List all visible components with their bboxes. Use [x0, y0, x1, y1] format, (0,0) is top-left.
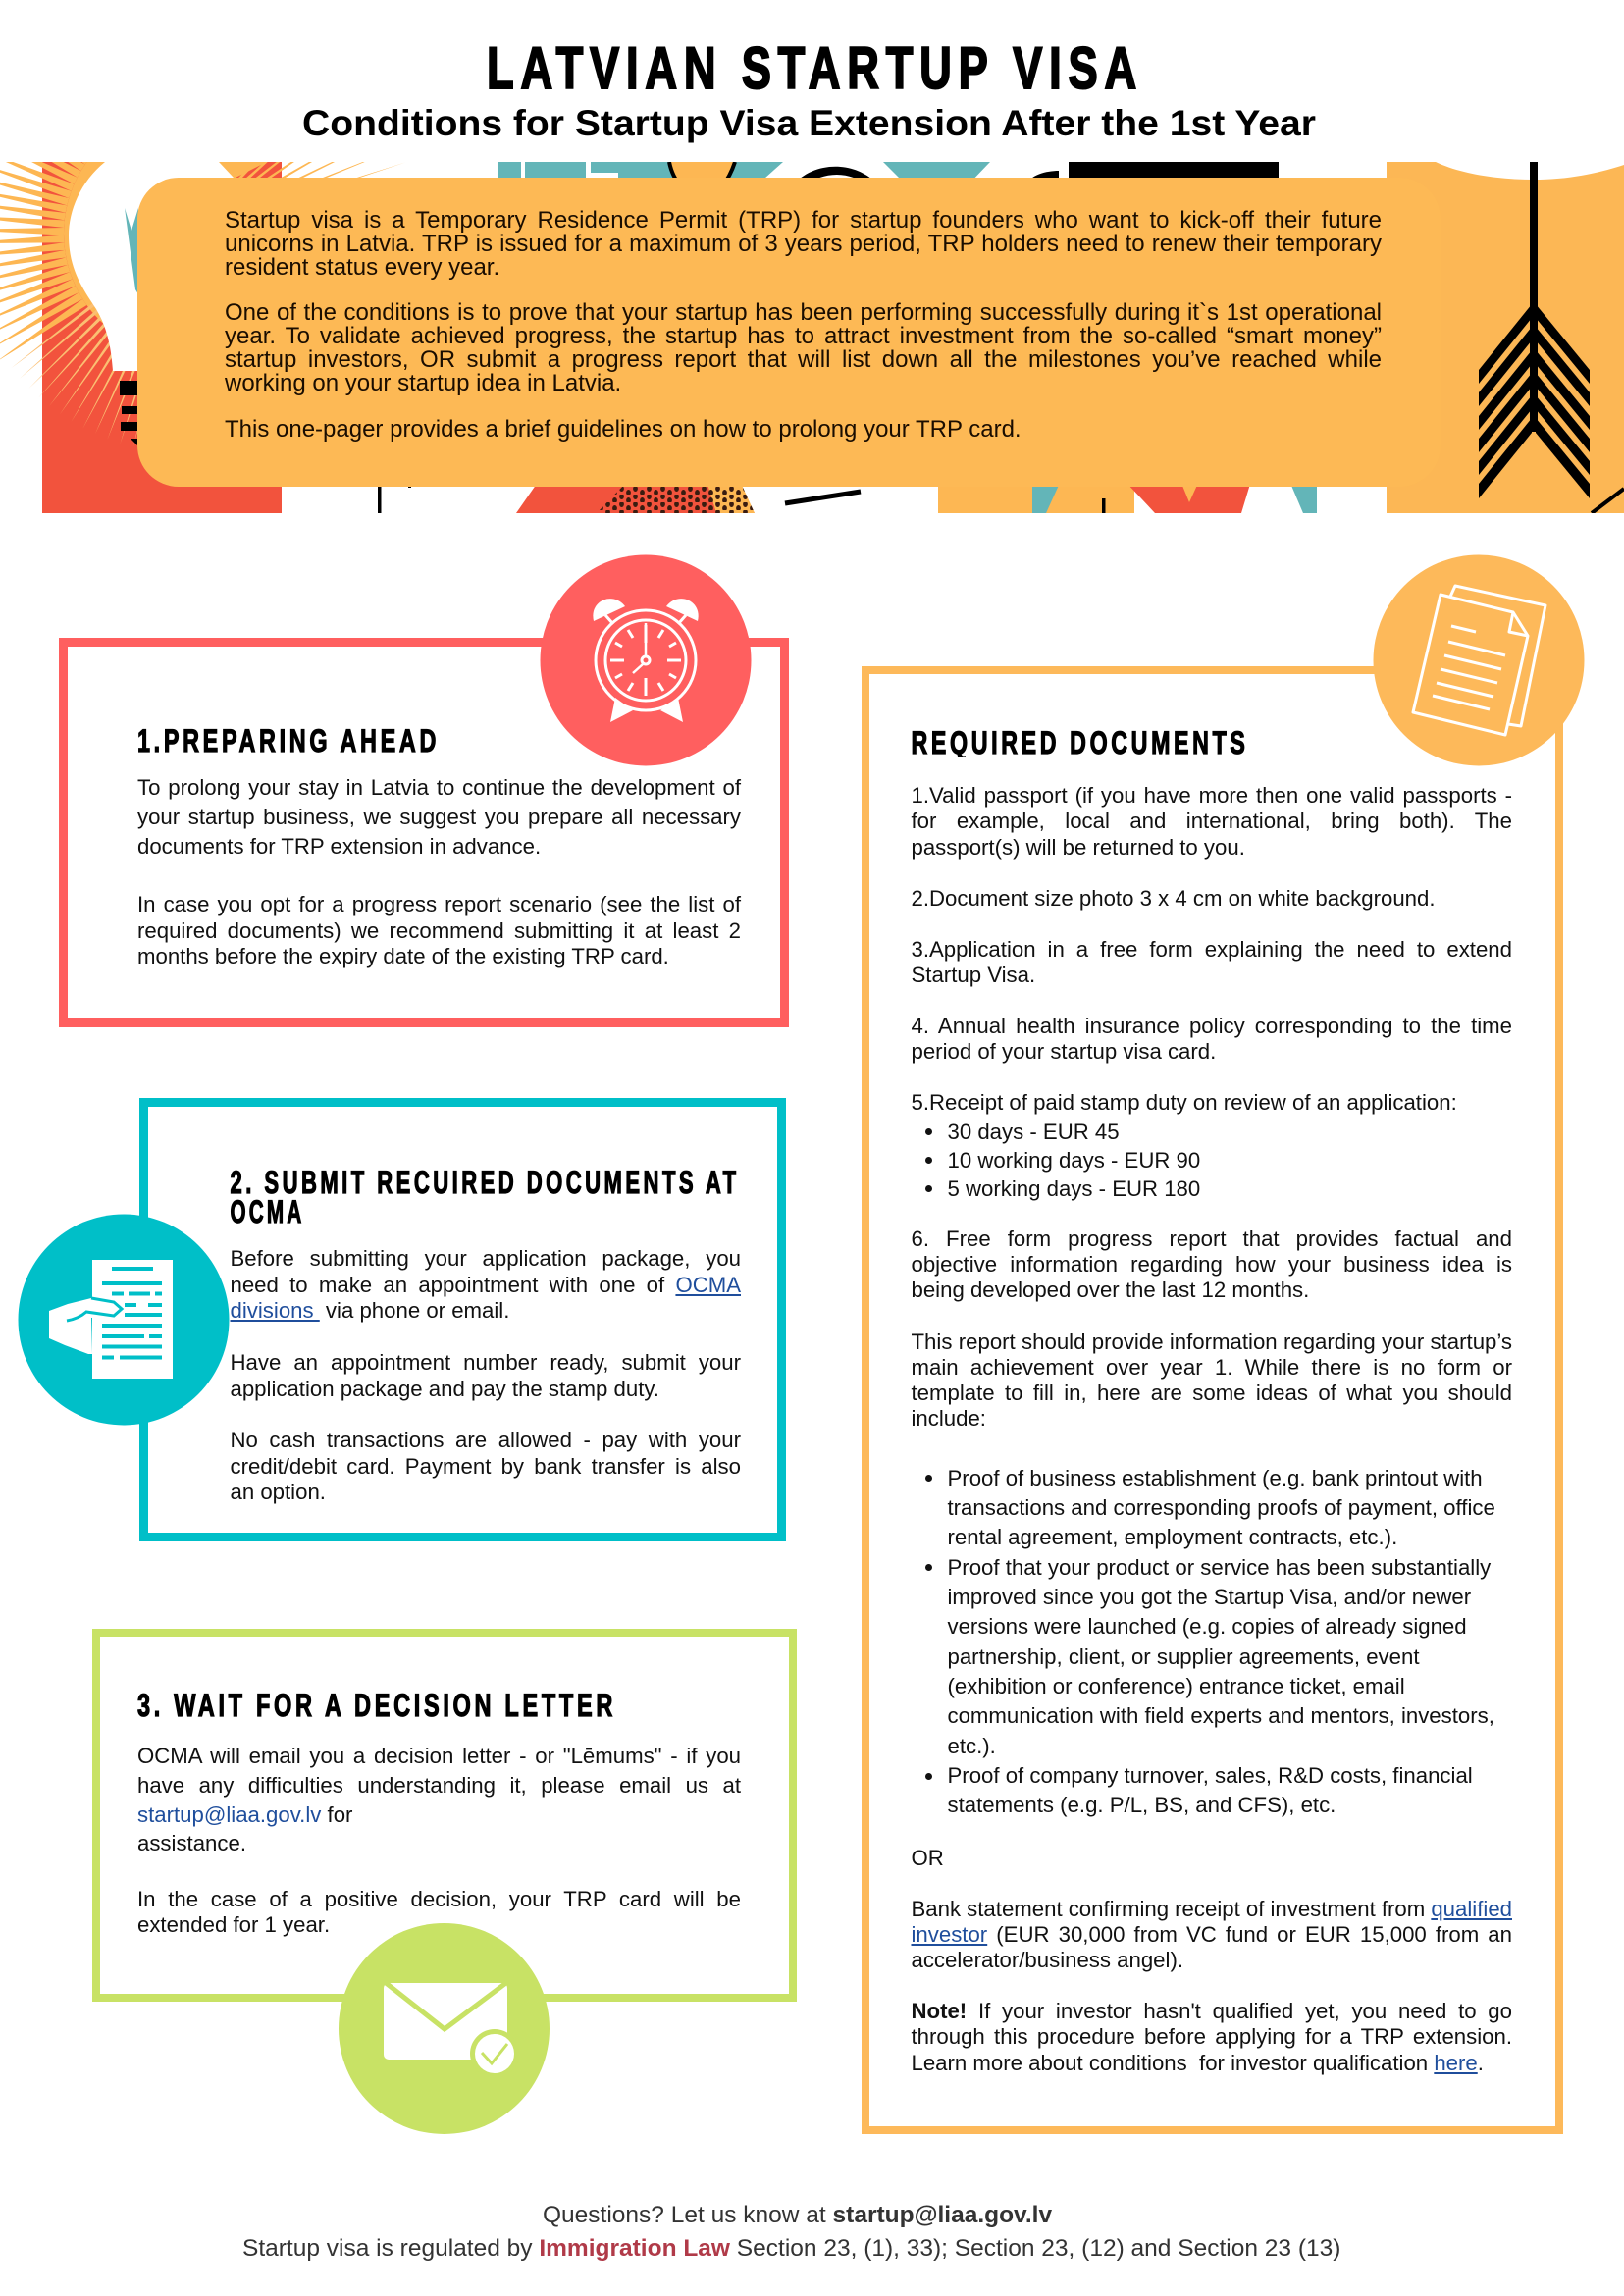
panel: required documents — [862, 555, 1584, 2134]
intro paragraph 1: resident status every year. — [225, 254, 499, 281]
intro paragraph 2: One of the conditions is to prove that your startup has been performing successfully during it`s 1st operational — [225, 299, 1382, 326]
list: report ideas: Proof that your product or service has been substantially — [948, 1555, 1491, 1580]
text: submit paragraph 1: need to make an appointment with one of OCMA — [230, 1272, 741, 1297]
banner illustration — [0, 162, 1624, 513]
text: item 5 stamp duty: 5.Receipt of paid stamp duty on review of an application: — [911, 1090, 1457, 1115]
list: report ideas: partnership, client, or supplier agreements, event — [948, 1644, 1419, 1669]
text: decision paragraph 1 — [137, 1744, 741, 1855]
intro paragraph 1: Startup visa is a Temporary Residence Permit (TRP) for startup founders who want to kick-off their future — [225, 207, 1382, 234]
icon: envelope with check — [339, 1923, 550, 2134]
text: item 6 progress report — [911, 1226, 1512, 1302]
text: preparing paragraph 1: To prolong your stay in Latvia to continue the development of — [137, 775, 741, 800]
subtitle: Conditions for Startup Visa Extension After the 1st Year — [302, 103, 1316, 143]
text: report description: This report should provide information regarding your startup’s — [911, 1329, 1512, 1354]
text: preparing paragraph 1: your startup business, we suggest you prepare all necessary — [137, 805, 741, 829]
list: stamp duty fees: 30 days - EUR 45 — [948, 1120, 1120, 1144]
list: stamp duty fees: 10 working days - EUR 90 — [948, 1148, 1200, 1173]
text: item 3 application: Startup Visa. — [911, 963, 1035, 987]
text: submit paragraph 1: Before submitting your application package, you — [230, 1246, 741, 1271]
text: preparing paragraph 2 — [137, 892, 742, 968]
list: report ideas: etc.). — [948, 1734, 996, 1758]
text: item 6 progress report: 6. Free form progress report that provides factual and — [911, 1226, 1512, 1250]
list: report ideas: Proof of company turnover, sales, R&D costs, financial — [948, 1763, 1473, 1788]
text: item 4 insurance — [911, 1014, 1512, 1064]
text: preparing paragraph 1 — [137, 775, 742, 859]
text: note — [911, 1999, 1512, 2075]
text: submit paragraph 3: No cash transactions are allowed - pay with your — [230, 1428, 741, 1452]
text: item 6 progress report: objective information regarding how your business idea is — [911, 1252, 1512, 1277]
icon: hand on document — [18, 1215, 230, 1425]
list: report ideas: versions were launched (e.g. copies of already signed — [948, 1614, 1467, 1639]
text: note: Note! If your investor hasn't qualified yet, you need to go — [911, 1999, 1512, 2023]
panel: intro — [137, 178, 1441, 487]
text: submit paragraph 1 — [230, 1246, 741, 1323]
panel: submit documents — [18, 1098, 786, 1541]
list: report ideas: Proof of business establishment (e.g. bank printout with — [948, 1466, 1483, 1489]
text: preparing paragraph 2: required documents) we recommend submitting it at least 2 — [137, 918, 741, 942]
text: submit paragraph 1: divisions via phone or email. — [230, 1298, 509, 1323]
text: decision paragraph 1: startup@liaa.gov.lv for — [137, 1802, 352, 1827]
text: decision paragraph 1: OCMA will email you a decision letter - or "Lēmums" - if you — [137, 1744, 741, 1768]
text: submit paragraph 3: credit/debit card. Payment by bank transfer is also — [230, 1454, 741, 1478]
text: item 1 passport: passport(s) will be returned to you. — [911, 835, 1245, 860]
list: stamp duty fees: 5 working days - EUR 180 — [948, 1176, 1200, 1201]
footer line: questions: Questions? Let us know at startup@liaa.gov.lv — [543, 2202, 1052, 2227]
text: preparing paragraph 2: months before the expiry date of the existing TRP card. — [137, 944, 669, 968]
list: report ideas: improved since you got the Startup Visa, and/or newer — [948, 1585, 1471, 1609]
text: bank statement: accelerator/business angel). — [911, 1948, 1183, 1972]
text: preparing paragraph 2: In case you opt for a progress report scenario (see the list of — [137, 892, 741, 916]
text: bank statement: investor (EUR 30,000 from VC fund or EUR 15,000 from an — [911, 1922, 1512, 1947]
footer line: regulation: Startup visa is regulated by Immigration Law Section 23, (1), 33); Section 23, (12) and Section 23 (13) — [242, 2235, 1340, 2261]
text: decision paragraph 2: extended for 1 year. — [137, 1911, 330, 1937]
text: report description: template to fill in, here are some ideas of what you should — [911, 1381, 1512, 1405]
text: submit paragraph 2 — [230, 1350, 741, 1401]
list: report ideas: communication with field experts and mentors, investors, — [948, 1703, 1494, 1728]
text: bank statement — [911, 1896, 1512, 1972]
text: item 4 insurance: period of your startup visa card. — [911, 1039, 1216, 1064]
text: note: through this procedure before applying for a TRP extension. — [911, 2024, 1512, 2049]
intro paragraph 3: This one-pager provides a brief guidelines on how to prolong your TRP card. — [225, 416, 1022, 443]
text: bank statement: Bank statement confirming receipt of investment from qualified — [911, 1896, 1512, 1921]
text: item 6 progress report: being developed over the last 12 months. — [911, 1278, 1309, 1302]
list: report ideas: rental agreement, employment contracts, etc.). — [948, 1525, 1397, 1549]
list: report ideas — [925, 1466, 1495, 1817]
text: note: Learn more about conditions for investor qualification here. — [911, 2051, 1484, 2075]
text: item 3 application — [911, 937, 1512, 987]
text: item 1 passport — [911, 783, 1512, 860]
list: report ideas: statements (e.g. P/L, BS, and CFS), etc. — [948, 1793, 1336, 1817]
panel: decision letter — [92, 1629, 797, 2134]
text: item 1 passport: 1.Valid passport (if you have more then one valid passports - — [911, 783, 1512, 808]
text: item 1 passport: for example, local and international, bring both). The — [911, 809, 1512, 833]
text: OR: OR — [911, 1846, 944, 1870]
text: item 2 photo: 2.Document size photo 3 x 4 cm on white background. — [911, 886, 1436, 911]
text: report description — [911, 1329, 1512, 1431]
text: submit paragraph 3 — [230, 1428, 741, 1504]
list: report ideas: (exhibition or conference) entrance ticket, email — [948, 1674, 1405, 1698]
text: decision paragraph 1: assistance. — [137, 1831, 246, 1855]
footer — [242, 2202, 1340, 2261]
list: report ideas: transactions and corresponding proofs of payment, office — [948, 1495, 1495, 1520]
text: preparing paragraph 1: documents for TRP extension in advance. — [137, 834, 541, 859]
text: decision paragraph 2 — [137, 1887, 741, 1937]
text: item 3 application: 3.Application in a free form explaining the need to extend — [911, 937, 1512, 962]
icon: documents — [1374, 555, 1584, 765]
text: item 4 insurance: 4. Annual health insurance policy corresponding to the time — [911, 1014, 1512, 1038]
intro paragraph 2: year. To validate achieved progress, the startup has to attract investment from the so-called “smart money” — [225, 323, 1382, 349]
intro paragraph 2 — [225, 299, 1382, 396]
text: submit paragraph 2: application package and pay the stamp duty. — [230, 1376, 659, 1401]
panel: preparing ahead — [59, 555, 789, 1027]
list: stamp duty fees — [925, 1120, 1200, 1201]
text: decision paragraph 2: In the case of a positive decision, your TRP card will be — [137, 1887, 741, 1911]
intro paragraph 1 — [225, 207, 1382, 281]
text: decision paragraph 1: have any difficulties understanding it, please email us at — [137, 1773, 741, 1798]
text: report description: main achievement over year 1. While there is no form or — [911, 1355, 1512, 1380]
heading: submit documents — [230, 1166, 740, 1226]
text: submit paragraph 3: an option. — [230, 1480, 326, 1504]
intro paragraph 2: startup investors, OR submit a progress report that will list down all the milestones you’ve reached while — [225, 346, 1382, 373]
intro paragraph 2: working on your startup idea in Latvia. — [225, 370, 621, 396]
icon: alarm clock — [540, 555, 752, 765]
intro paragraph 1: unicorns in Latvia. TRP is issued for a maximum of 3 years period, TRP holders need to renew their temporary — [225, 231, 1382, 257]
text: submit paragraph 2: Have an appointment number ready, submit your — [230, 1350, 741, 1375]
text: report description: include: — [911, 1406, 986, 1431]
